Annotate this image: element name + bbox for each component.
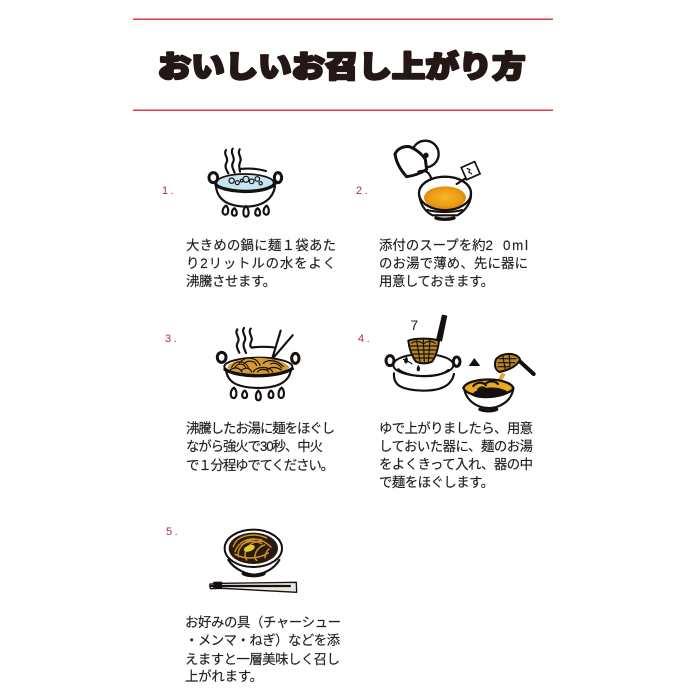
- text: step 2: 0ml: [503, 238, 528, 253]
- icon: finished bowl and chopsticks: [210, 530, 297, 592]
- text: step 3: で１分程ゆでてください。: [186, 458, 334, 473]
- text: step 3: [186, 420, 335, 473]
- text: step 1: 大きめの鍋に麺１袋あた: [186, 238, 336, 253]
- text: step 5: 上がれます。: [185, 669, 263, 684]
- panel: step 4: [358, 315, 534, 490]
- text: step 5: お好みの具（チャーシュー: [185, 615, 341, 630]
- text: step 1: り2リットルの水をよく: [186, 256, 336, 271]
- text: step 3: ながら強火で30秒、中火: [186, 439, 323, 454]
- text: step 1: 沸騰させます。: [186, 273, 276, 289]
- title: おいしいお召し上がり方: [158, 50, 525, 84]
- text: step 4: で麺をほぐします。: [379, 475, 494, 490]
- text: step 2: のお湯で薄め、先に器に: [379, 256, 528, 271]
- panel: step 2: [356, 141, 528, 289]
- step number 2: 2.: [356, 185, 370, 197]
- step number 1: 1.: [162, 185, 176, 197]
- text: step 2: [379, 238, 528, 289]
- step number 4: 4.: [358, 333, 372, 345]
- text: step 2: 添付のスープを約2: [379, 238, 493, 253]
- text: step 5: [185, 615, 341, 684]
- panel: step 3: [165, 328, 335, 473]
- text: step 2: 用意しておきます。: [379, 274, 494, 289]
- panel: step 1: [162, 149, 336, 289]
- icon: kettle and soup bowl: [395, 141, 480, 219]
- text: step 4: [379, 421, 533, 490]
- icon: noodles in pot: [217, 328, 299, 400]
- step number 5: 5.: [166, 526, 180, 538]
- panel: step 5: [166, 526, 341, 684]
- step number 3: 3.: [165, 333, 179, 345]
- icon: boiling pot: [209, 149, 282, 217]
- icon: draining noodles: [386, 315, 534, 411]
- text: step 4: しておいた器に、麺のお湯: [379, 439, 533, 454]
- label: seven: 7: [410, 317, 418, 333]
- text: step 3: 沸騰したお湯に麺をほぐし: [186, 420, 335, 436]
- text: step 1: [186, 238, 336, 289]
- text: step 5: えますと一層美味しく召し: [185, 652, 340, 667]
- text: step 4: をよくきって入れ、器の中: [379, 457, 533, 472]
- text: step 4: ゆで上がりましたら、用意: [379, 421, 533, 436]
- text: step 5: ・メンマ・ねぎ）などを添: [185, 633, 341, 648]
